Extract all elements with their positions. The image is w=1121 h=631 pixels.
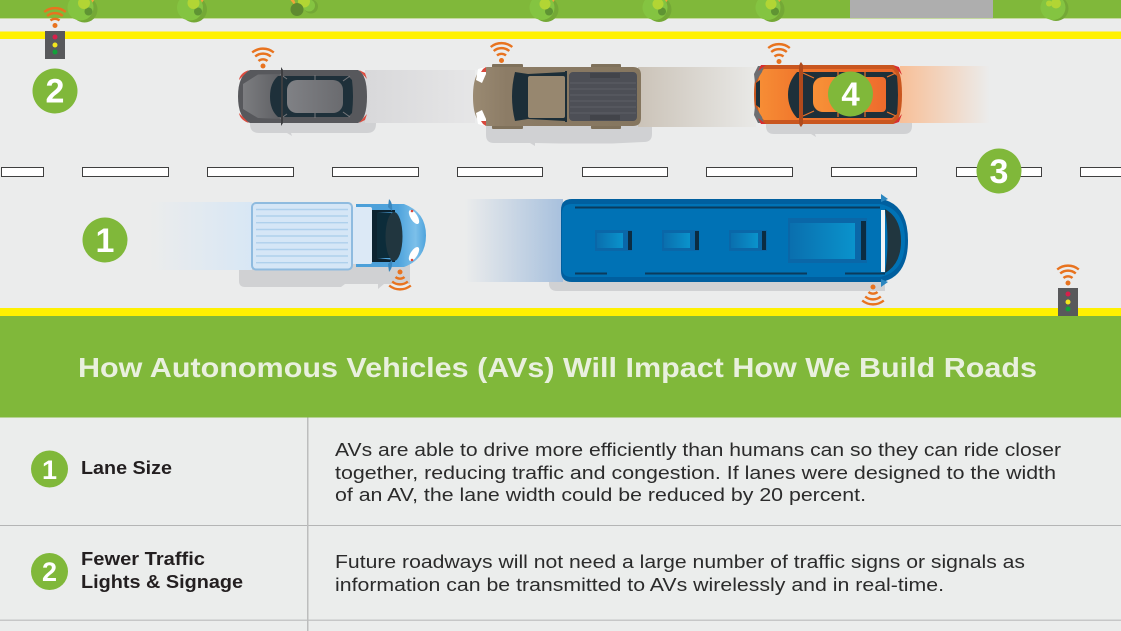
vehicle: pickup truck <box>473 64 641 129</box>
number badge 1 on road <box>82 218 128 262</box>
bottom yellow road line <box>0 308 1121 316</box>
row 2 badge: 2 <box>42 557 57 587</box>
top yellow road line <box>0 32 1121 39</box>
row 2 label: Fewer Traffic <box>81 548 205 569</box>
row 2: fewer traffic lights and signage <box>31 548 1025 595</box>
number badge 3 on road: 3 <box>990 153 1008 191</box>
number badge 1 on road: 1 <box>96 222 114 260</box>
number badge 2 on road: 2 <box>46 72 64 110</box>
number badge 2 on road <box>32 68 78 114</box>
row 1 description <box>335 439 1061 505</box>
number badge 3 on road <box>976 148 1022 194</box>
icon: wifi signals <box>44 8 1079 304</box>
row 1 badge: 1 <box>42 455 57 485</box>
row 2 description <box>335 551 1025 595</box>
row 2 description: Future roadways will not need a large number of traffic signs or signals as <box>335 551 1025 572</box>
vehicle: bus <box>561 194 908 287</box>
number badge 4 on car: 4 <box>841 76 860 112</box>
sidewalk segment <box>850 0 993 18</box>
title banner <box>0 316 1121 418</box>
row 1 label: Lane Size <box>81 457 172 478</box>
vehicle: orange car <box>754 62 902 127</box>
row 1 badge <box>31 450 68 488</box>
number badge 4 on car <box>828 72 873 116</box>
road surface <box>0 0 1121 316</box>
row 2 label <box>81 548 243 592</box>
row 2 description: information can be transmitted to AVs wirelessly and in real-time. <box>335 574 944 595</box>
row 1 description: AVs are able to drive more efficiently than humans can so they can ride closer <box>335 439 1061 460</box>
motion trails <box>150 66 990 282</box>
grass verge <box>0 0 1121 19</box>
trees <box>68 0 1068 22</box>
row 1: lane size <box>31 439 1061 505</box>
row 2 label: Lights & Signage <box>81 571 243 592</box>
title banner: How Autonomous Vehicles (AVs) Will Impact How We Build Roads <box>78 352 1037 383</box>
row 2 badge <box>31 553 68 590</box>
traffic light: top left <box>45 31 65 59</box>
traffic light: bottom right <box>1058 288 1078 316</box>
vehicle shadows <box>239 100 912 291</box>
vehicle: delivery truck <box>252 199 426 272</box>
table panel <box>0 418 1121 631</box>
lane dashes <box>2 168 1121 176</box>
vehicle: gray car <box>238 67 367 126</box>
row 1 description: together, reducing traffic and congestion. If lanes were designed to the width <box>335 462 1056 483</box>
row 1 description: of an AV, the lane width could be reduced by 20 percent. <box>335 484 866 505</box>
